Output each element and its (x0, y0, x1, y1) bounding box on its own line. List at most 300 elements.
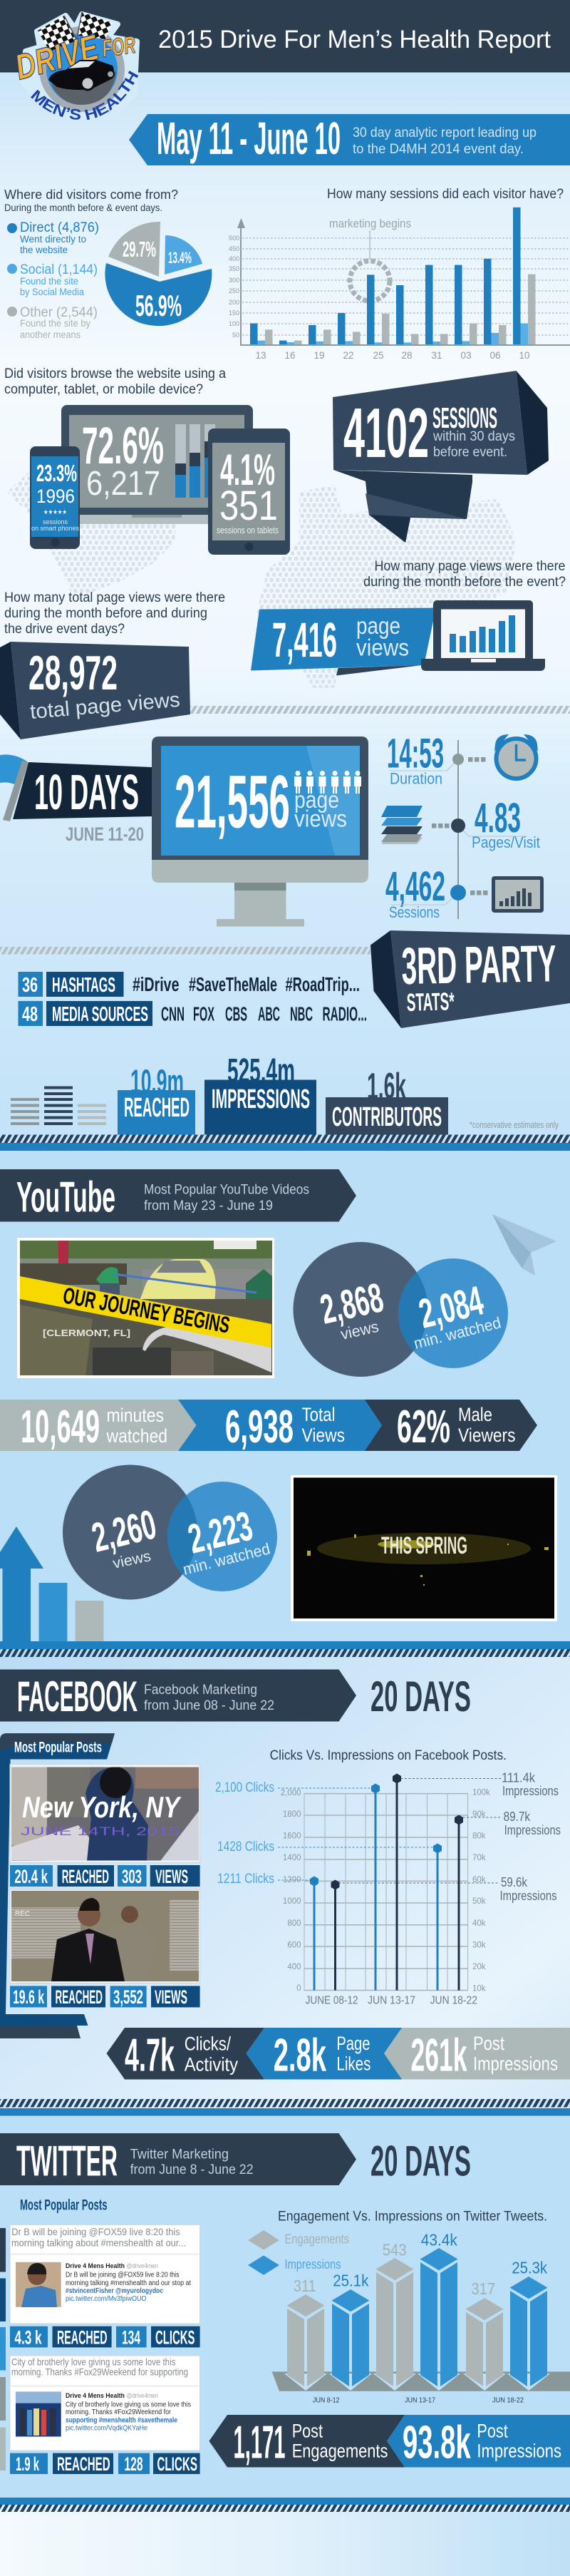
chart: Facebook clicks vs impressions: JUN 13-17 (368, 1995, 415, 2006)
stat: clicks: Clicks/ (185, 2033, 231, 2055)
laptop bars (175, 424, 215, 498)
ribbon: 28,972 total page views: 28,972 (28, 646, 118, 700)
photo: New York event (10, 1764, 200, 1862)
venn: video 2 stats: 2,260 (88, 1501, 161, 1561)
stats: post 1: 303 (122, 1866, 142, 1887)
photo: two men in suits: REC (15, 1910, 30, 1918)
stat: post impressions: Post (473, 2033, 504, 2054)
title: 2015 Drive For Men’s Health Report (158, 26, 551, 53)
background: footer (0, 2510, 570, 2576)
stats: post 1: REACHED (62, 1866, 109, 1887)
venn: video 1 stats (294, 1242, 508, 1377)
icon: desktop monitor with 21,556 page views (152, 737, 368, 927)
legend: traffic sources (7, 220, 99, 340)
banner: Facebook: from June 08 - June 22 (144, 1698, 274, 1713)
heading: visitor sources (4, 188, 178, 213)
background: Twitter section (0, 2114, 570, 2503)
bar values (294, 2230, 547, 2298)
bar values: 543 (383, 2240, 407, 2259)
bar values: 317 (471, 2279, 495, 2298)
venn: video 2 stats (63, 1464, 277, 1600)
tweet card 1: #stvincentFisher @myurologydoc (66, 2287, 163, 2295)
icon: desktop monitor with 21,556 page views: 21,556 (175, 760, 290, 844)
chart: Twitter engagement vs impressions: JUN 8-12 (313, 2396, 340, 2404)
video thumbnail: this spring (291, 1475, 557, 1621)
photo: New York event: New York, NY (22, 1790, 182, 1824)
callouts: impressions: 89.7k (504, 1810, 531, 1824)
device: tablet: sessions on tablets (217, 525, 279, 535)
tweet card 1: morning talking #menshealth and our stop at (66, 2279, 191, 2287)
section band (0, 2498, 570, 2512)
row: media sources: ABC (258, 1002, 280, 1025)
stat: post engagements: Post (292, 2420, 323, 2441)
heading: page views before event: during the month before the event? (363, 575, 566, 590)
pie chart: traffic sources: 29.7% (123, 237, 156, 262)
ribbon: 4102 sessions (333, 371, 549, 543)
callouts: impressions: 111.4k (502, 1771, 536, 1785)
photo: two men in suits (10, 1889, 200, 1984)
video location: [CLERMONT, FL] (43, 1328, 130, 1338)
device: tablet: 4.1% (220, 446, 275, 495)
stat: contributors (326, 1066, 448, 1135)
heading: total page views: during the month before and during (4, 606, 207, 621)
logo wordmark: FOR (100, 31, 138, 63)
ribbon: 3rd party stats (370, 930, 570, 1028)
stat: pages per visit: 4.83 (475, 795, 521, 841)
stat: male viewers: 62% (397, 1400, 450, 1452)
device: phone: 23.3% (36, 460, 77, 486)
chart: Facebook clicks vs impressions: 600 (287, 1941, 301, 1949)
banner: Facebook: FACEBOOK (17, 1673, 138, 1720)
stat: male viewers: Viewers (458, 1425, 516, 1446)
stats: tweet 1: REACHED (57, 2326, 107, 2348)
callouts: clicks (215, 1780, 437, 1887)
row: hashtags: #RoadTrip... (285, 973, 360, 995)
callouts: clicks: 2,100 Clicks (215, 1780, 274, 1795)
tweet card 2: City of brotherly love giving us some love this (11, 2356, 175, 2367)
bar: 25.1k impressions (332, 2289, 369, 2386)
bar chart: sessions: 100 (229, 320, 239, 327)
stats: post 2 (10, 1986, 200, 2008)
panel heading: Most Popular Posts (14, 1740, 102, 1755)
callouts: impressions: Impressions (500, 1889, 557, 1903)
stat: sessions: 4,462 (385, 863, 445, 910)
chart: Facebook clicks vs impressions: 90k (472, 1810, 486, 1819)
heading: total page views: How many total page views were there (4, 590, 225, 605)
row: media sources: RADIO... (322, 1002, 367, 1025)
banner: YouTube: YouTube (16, 1174, 115, 1221)
stats: post 1 (10, 1865, 200, 1887)
panel heading: Most Popular Posts (20, 2197, 107, 2213)
stats: post 1: VIEWS (155, 1866, 188, 1887)
stat: clicks: Activity (185, 2053, 238, 2075)
annotation: marketing begins: marketing begins (329, 217, 411, 230)
heading: total page views (4, 590, 225, 637)
bar chart: sessions: 450 (229, 245, 239, 252)
legend: other: Found the site by (20, 318, 90, 329)
banner: Facebook (0, 1670, 356, 1721)
bar chart: sessions: 13 (255, 350, 266, 361)
pie chart: traffic sources: 56.9% (135, 289, 182, 322)
legend: direct: the website (20, 245, 68, 255)
tweet card 1: Dr B will be joining @FOX59 live 8:20 this (11, 2226, 180, 2237)
chart: Twitter engagement vs impressions: JUN 18-22 (492, 2396, 524, 2404)
row: media sources: MEDIA SOURCES (52, 1003, 148, 1026)
callouts: clicks: 1211 Clicks (217, 1872, 274, 1887)
stat: page likes: 2.8k (274, 2029, 326, 2080)
sessions label (432, 401, 515, 460)
banner: YouTube (0, 1169, 356, 1222)
bar chart: sessions: 25 (373, 350, 384, 361)
stat: post engagements: 1,171 (234, 2416, 285, 2468)
legend: direct: Direct (4,876) (20, 220, 99, 235)
bar chart: sessions: 22 (343, 350, 354, 361)
bar chart: sessions: 150 (229, 309, 239, 317)
icon: laptop with chart (421, 600, 545, 671)
panel: Twitter most popular posts (0, 2197, 200, 2475)
device: laptop: 72.6% (82, 417, 164, 475)
stats: tweet 2: REACHED (57, 2453, 110, 2475)
banner: YouTube: from May 23 - June 19 (144, 1199, 273, 1213)
callouts: impressions: 59.6k (501, 1875, 528, 1889)
chart: Facebook clicks vs impressions: 80k (472, 1832, 486, 1841)
bar chart: sessions: 31 (431, 350, 442, 361)
banner description: to the D4MH 2014 event day. (353, 142, 524, 157)
tweet card 2: Drive 4 Mens Health (66, 2392, 125, 2400)
heading: devices: Did visitors browse the website using a (4, 366, 226, 381)
callouts: impressions (335, 1771, 561, 1903)
chart: Facebook clicks vs impressions: JUN 18-22 (430, 1995, 477, 2006)
bar chart: sessions: 200 (229, 299, 239, 306)
device: laptop: 6,217 (86, 465, 160, 503)
video headline: OUR JOURNEY BEGINS (61, 1282, 232, 1338)
icon: paper plane (492, 1214, 556, 1276)
bar chart: sessions: 50 (232, 332, 239, 339)
chart: Facebook clicks vs impressions: 40k (472, 1919, 486, 1928)
stat: impressions: IMPRESSIONS (212, 1084, 310, 1114)
photo: New York event: JUNE 14TH, 2015 (21, 1825, 180, 1838)
heading: page views before event (363, 559, 566, 590)
chart: Twitter engagement vs impressions (272, 2230, 570, 2404)
banner: Twitter: from June 8 - June 22 (130, 2162, 254, 2177)
stats: post 2: 3,552 (113, 1986, 143, 2008)
venn: video 2 stats: 2,223 (184, 1502, 257, 1563)
chart: Facebook clicks vs impressions: 800 (287, 1919, 301, 1928)
heading: total page views: the drive event days? (4, 622, 125, 637)
video thumbnail: this spring: THIS SPRING (381, 1532, 467, 1559)
ribbon: 28,972 total page views: total page views (29, 689, 181, 724)
stat: impressions (204, 1052, 316, 1135)
stats: post 2: 19.6 k (13, 1986, 45, 2008)
stat: pages per visit: Pages/Visit (472, 833, 540, 851)
ribbon: 3rd party stats: STATS* (406, 987, 455, 1017)
heading: devices: computer, tablet, or mobile device? (4, 382, 203, 397)
stats: tweet 1 (10, 2326, 200, 2348)
legend: Twitter chart (248, 2230, 349, 2275)
tweet card 1: @drive4men (127, 2262, 158, 2269)
tweet photo (16, 2262, 61, 2307)
band: Facebook totals (107, 2028, 570, 2080)
hatched divider (190, 706, 570, 714)
heading: visitor sources: During the month before & event days. (4, 202, 162, 213)
tweet card 2: morning. Thanks #Fox29Weekend for (66, 2408, 172, 2416)
stat: total views: Views (302, 1425, 345, 1446)
stacked stripes decoration (11, 1087, 106, 1125)
venn: video 2 stats: views (111, 1548, 152, 1572)
bar chart: sessions: 03 (460, 350, 472, 361)
chart: Facebook clicks vs impressions: 1400 (283, 1854, 301, 1862)
hatched divider (0, 947, 370, 954)
banner: Twitter: Twitter Marketing (130, 2147, 229, 2162)
venn: video 1 stats: 2,868 (316, 1274, 388, 1333)
stat: clicks: 4.7k (125, 2029, 175, 2080)
legend: other: Other (2,544) (20, 305, 98, 320)
chart: Facebook clicks vs impressions: 30k (472, 1941, 486, 1949)
chart: Facebook clicks vs impressions: 2,000 (281, 1789, 301, 1797)
sessions label: before event. (433, 445, 507, 460)
header bar (0, 0, 570, 73)
tweet card 2: pic.twitter.com/VqdkQKYaHe (66, 2424, 147, 2433)
sessions number: 4102 (343, 394, 429, 472)
logo car (48, 60, 114, 90)
band: Twitter totals (209, 2415, 570, 2468)
device: tablet (208, 429, 290, 555)
stat: reached: 10.9m (130, 1062, 184, 1100)
stats: tweet 2: 1.9 k (16, 2453, 40, 2475)
ribbon: 7,416 page views: page (356, 612, 400, 639)
row: media sources: CBS (225, 1002, 247, 1025)
legend: other: another means (20, 329, 81, 340)
tweet card 1: Drive 4 Mens Health (66, 2262, 125, 2270)
chart: Facebook clicks vs impressions: 0 (296, 1984, 301, 1993)
stats: tweet 2: 128 (124, 2453, 142, 2475)
legend: direct (7, 220, 99, 255)
icon: desktop monitor with 21,556 page views: page (294, 786, 339, 813)
chart: Facebook clicks vs impressions: 400 (287, 1963, 301, 1971)
stat: impressions: 525.4m (227, 1052, 295, 1090)
tweet photo (16, 2392, 61, 2437)
bar chart: sessions: 06 (489, 350, 501, 361)
stat: sessions: Sessions (389, 903, 440, 921)
stats: post 2: REACHED (56, 1986, 103, 2008)
legend: Twitter chart: Engagements (285, 2232, 349, 2246)
logo tagline: MEN’S HEALTH (31, 71, 138, 120)
stat: contributors: 1.6k (367, 1066, 406, 1107)
banner description (353, 125, 537, 157)
ribbon: 7,416 page views: 7,416 (272, 612, 337, 667)
background: analytics section (0, 71, 570, 1144)
bar: 311 engagements (286, 2294, 325, 2386)
stat: reached: REACHED (124, 1093, 190, 1123)
ribbon: 7,416 page views (251, 607, 436, 676)
callouts: clicks: 1428 Clicks (217, 1839, 274, 1854)
chart: Twitter engagement vs impressions: JUN 13-17 (405, 2396, 435, 2404)
row: hashtags: #SaveTheMale (189, 973, 277, 995)
heading: devices (4, 366, 226, 397)
device: laptop (61, 405, 253, 524)
stat: post impressions: Post (477, 2420, 508, 2441)
venn: video 1 stats: views (339, 1318, 380, 1343)
bar chart: sessions: 400 (229, 255, 239, 262)
stat: post engagements: Engagements (292, 2440, 388, 2461)
bar chart: sessions: 19 (314, 350, 325, 361)
venn: video 2 stats: min. watched (181, 1539, 271, 1579)
stat: page likes: Page (336, 2033, 370, 2054)
chart: Facebook clicks vs impressions: 1200 (283, 1876, 301, 1884)
band: YouTube totals (0, 1400, 537, 1452)
bar: 43.4k impressions (420, 2248, 457, 2386)
pins: clicks (310, 1784, 442, 1991)
device: phone: ★★★★★ (43, 508, 67, 515)
date label: JUNE 11-20 (66, 823, 144, 845)
chart: Facebook clicks vs impressions: 1000 (283, 1897, 301, 1906)
background: Facebook section (0, 1654, 570, 2114)
stat: post impressions: 261k (410, 2029, 467, 2080)
venn: video 1 stats: 2,084 (415, 1277, 488, 1338)
bar chart: sessions: 16 (284, 350, 296, 361)
annotation: marketing begins (329, 217, 411, 301)
stats: tweet 1: 134 (122, 2326, 140, 2348)
chart: Facebook clicks vs impressions: 1600 (283, 1832, 301, 1841)
stat: minutes watched: watched (106, 1425, 167, 1447)
bar: 317 engagements (466, 2298, 503, 2386)
video thumbnail: our journey begins (17, 1238, 274, 1378)
chart: Facebook clicks vs impressions: 1800 (283, 1810, 301, 1819)
row: media sources: FOX (193, 1002, 214, 1025)
icon: mini bar chart (492, 876, 544, 913)
pie chart: traffic sources (105, 222, 212, 326)
stat: minutes watched: 10,649 (21, 1400, 100, 1452)
tweet card 2: morning. Thanks #Fox29Weekend for supporting (11, 2366, 188, 2377)
legend: social: Found the site (20, 276, 78, 287)
section band (0, 1135, 570, 1151)
banner description: 30 day analytic report leading up (353, 125, 537, 140)
stat: pages per visit (432, 795, 540, 851)
section band (0, 1641, 570, 1657)
row: media sources: 48 (22, 1003, 38, 1026)
timeline (381, 730, 544, 921)
legend: other (7, 305, 98, 340)
date range: May 11 - June 10 (157, 113, 341, 164)
legend: direct: Went directly to (20, 234, 86, 245)
bar chart: sessions: 350 (229, 265, 239, 272)
bar chart: sessions: 300 (229, 277, 239, 284)
heading: Twitter chart: Engagement Vs. Impressions on Twitter Tweets. (278, 2209, 547, 2225)
icon: desktop monitor with 21,556 page views: views (294, 806, 347, 831)
stat: duration: 14:53 (387, 730, 444, 777)
icon: stacked layers (381, 806, 423, 844)
stat: page likes: Likes (336, 2053, 370, 2075)
bar chart: sessions: 28 (401, 350, 413, 361)
label: 20 days: 20 DAYS (370, 1673, 471, 1720)
device: phone: 1996 (36, 486, 75, 507)
stats: post 1: 20.4 k (14, 1866, 48, 1887)
stats: tweet 2: CLICKS (157, 2453, 197, 2475)
logo: Drive For Men's Health (11, 11, 140, 120)
bar values: 43.4k (421, 2230, 457, 2249)
tweet card 1: morning talking about #menshealth at our... (11, 2237, 186, 2249)
world map dots (7, 463, 517, 688)
rising bars with arrow (0, 1526, 103, 1641)
chart: Facebook clicks vs impressions: 50k (472, 1897, 486, 1906)
heading: visitor sources: Where did visitors come from? (4, 188, 178, 202)
legend: Twitter chart: Impressions (285, 2257, 341, 2272)
tweet card 2: supporting #menshealth #savethemale (66, 2417, 177, 2425)
bar: 25.3k impressions (510, 2277, 547, 2386)
background: YouTube section (0, 1144, 570, 1654)
flag: 10 days: 10 DAYS (34, 764, 139, 820)
bar: 543 engagements (376, 2258, 413, 2386)
device: phone (30, 446, 80, 549)
stat: total views: Total (302, 1404, 335, 1425)
tweet card 1: Dr B will be joining @FOX59 live 8:20 this (66, 2272, 180, 2279)
banner: Facebook: Facebook Marketing (144, 1683, 257, 1698)
bar values: 311 (294, 2277, 316, 2295)
date banner (129, 113, 570, 165)
label: 20 days: 20 DAYS (370, 2138, 471, 2185)
stat: total views: 6,938 (225, 1400, 294, 1452)
chart: Facebook clicks vs impressions: 100k (472, 1788, 490, 1797)
legend: social: by Social Media (20, 287, 84, 297)
row: hashtags: #iDrive (133, 973, 180, 995)
bar chart: sessions (229, 207, 570, 361)
callouts: impressions: Impressions (502, 1784, 559, 1798)
pie chart: traffic sources: 13.4% (168, 249, 192, 267)
stats: post 2: VIEWS (155, 1986, 187, 2008)
venn: video 1 stats: min. watched (412, 1313, 502, 1353)
row: hashtags: HASHTAGS (52, 974, 115, 997)
stat: post impressions: 93.8k (403, 2416, 471, 2468)
bar values: 25.1k (333, 2271, 369, 2289)
stat: contributors: CONTRIBUTORS (332, 1102, 442, 1132)
tweet card 2 (10, 2356, 200, 2451)
stat: duration: Duration (390, 770, 442, 787)
stat: minutes watched: minutes (107, 1405, 164, 1426)
stat: reached (118, 1062, 195, 1135)
bar chart: sessions: 500 (229, 235, 239, 242)
heading: Facebook chart: Clicks Vs. Impressions on Facebook Posts. (270, 1748, 507, 1763)
banner: Twitter (0, 2133, 356, 2185)
ribbon: 28,972 total page views (0, 642, 190, 739)
chart: Facebook clicks vs impressions: 20k (472, 1963, 486, 1971)
bar chart: sessions: 10 (519, 350, 530, 361)
row: hashtags (19, 972, 360, 997)
tweet card 2: City of brotherly love giving us some love this (66, 2401, 191, 2408)
device: tablet: 351 (219, 483, 278, 529)
section band (0, 2099, 570, 2116)
chart: Facebook clicks vs impressions (215, 1771, 561, 2006)
chart: Facebook clicks vs impressions: 60k (472, 1876, 486, 1884)
icon: alarm clock (494, 734, 538, 779)
ribbon: 7,416 page views: views (356, 635, 409, 660)
panel: Facebook most popular posts (0, 1733, 200, 2038)
row: media sources (19, 1001, 367, 1026)
stats: tweet 1: CLICKS (155, 2326, 195, 2348)
stat: male viewers: Male (458, 1404, 492, 1425)
legend: social (7, 262, 98, 297)
panel frame (0, 1733, 115, 2038)
legend: social: Social (1,144) (20, 262, 98, 277)
stats: tweet 1: 4.3 k (14, 2326, 42, 2348)
tweet card 2: @drive4men (127, 2392, 158, 2399)
bar chart: sessions: 250 (229, 287, 239, 294)
device: phone: sessions (43, 518, 68, 525)
banner: Twitter: TWITTER (16, 2138, 118, 2185)
tweet card 1 (10, 2225, 200, 2324)
color strip (0, 2228, 6, 2470)
stats: tweet 2 (10, 2453, 200, 2475)
row: hashtags: 36 (22, 974, 38, 997)
